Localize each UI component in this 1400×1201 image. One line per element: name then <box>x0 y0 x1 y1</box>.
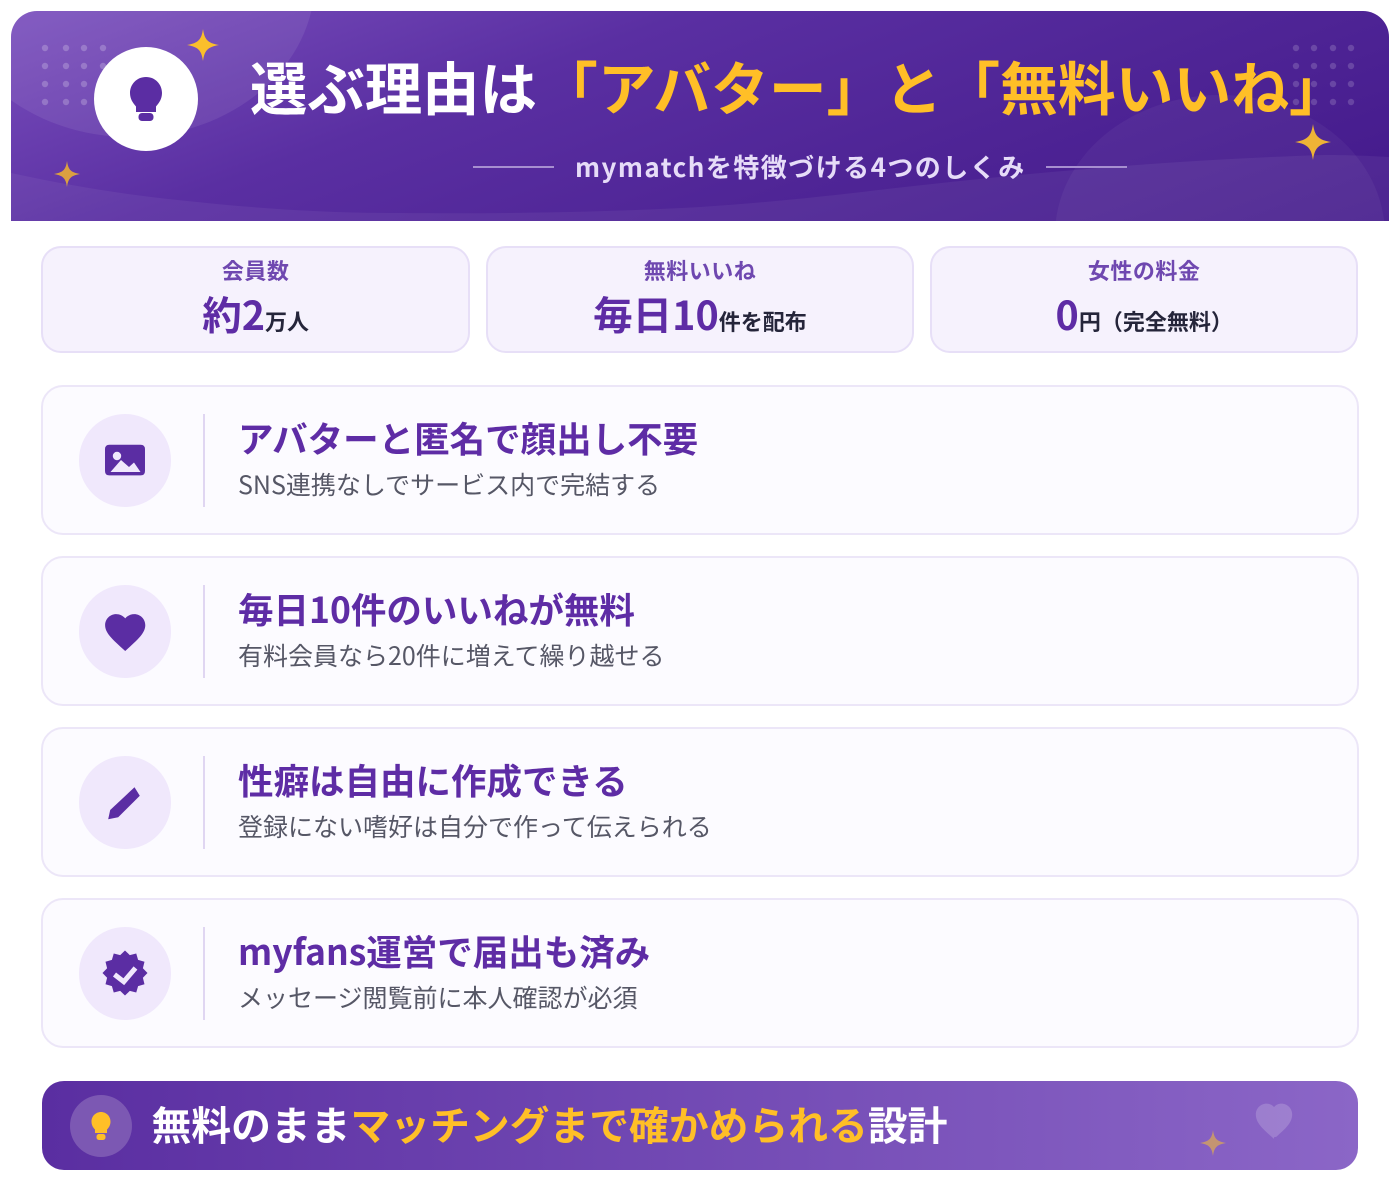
banner message: 無料のままマッチングまで確かめられる設計 <box>152 1095 947 1152</box>
icon: verified badge <box>78 927 171 1020</box>
bottom banner <box>42 1081 1358 1170</box>
card description: SNS連携なしでサービス内で完結する <box>238 466 660 502</box>
icon: lightbulb <box>70 1095 132 1157</box>
stat label: 女性の料金 <box>1088 254 1200 286</box>
stat value: 0円（完全無料） <box>1056 285 1233 342</box>
stat value: 約2万人 <box>202 285 309 342</box>
card description: メッセージ閲覧前に本人確認が必須 <box>238 978 638 1014</box>
stat label: 会員数 <box>222 254 289 286</box>
subtitle: mymatchを特徴づける4つのしくみ <box>575 148 1026 185</box>
stat card: women's fee <box>930 246 1358 353</box>
icon: heart <box>78 585 171 678</box>
header background shapes <box>11 11 1389 221</box>
card description: 有料会員なら20件に増えて繰り越せる <box>238 636 665 672</box>
icon: pencil <box>78 756 171 849</box>
icon: sparkle top <box>187 29 219 61</box>
icon: sparkle <box>1200 1130 1226 1156</box>
card heading: myfans運営で届出も済み <box>238 924 650 976</box>
icon: sparkle right <box>1295 124 1331 160</box>
stat value: 毎日10件を配布 <box>593 285 807 342</box>
icon: sparkle left <box>54 161 80 187</box>
card heading: 毎日10件のいいねが無料 <box>238 582 635 634</box>
card heading: アバターと匿名で顔出し不要 <box>238 412 698 462</box>
card heading: 性癖は自由に作成できる <box>238 754 628 804</box>
icon: lightbulb in white circle <box>94 47 198 151</box>
panel: daily free likes <box>41 556 1359 706</box>
title: 選ぶ理由は「アバター」と「無料いいね」 <box>250 43 1347 127</box>
card description: 登録にない嗜好は自分で作って伝えられる <box>238 808 712 844</box>
panel: free-form preferences <box>41 727 1359 877</box>
stat card: members <box>41 246 470 353</box>
panel: avatar and anonymity <box>41 385 1359 535</box>
panel: myfans operation <box>41 898 1359 1048</box>
header banner <box>11 11 1389 221</box>
stat card: free likes <box>486 246 914 353</box>
icon: image <box>78 414 171 507</box>
icon: faded heart <box>1256 1104 1292 1138</box>
stat label: 無料いいね <box>644 254 756 286</box>
